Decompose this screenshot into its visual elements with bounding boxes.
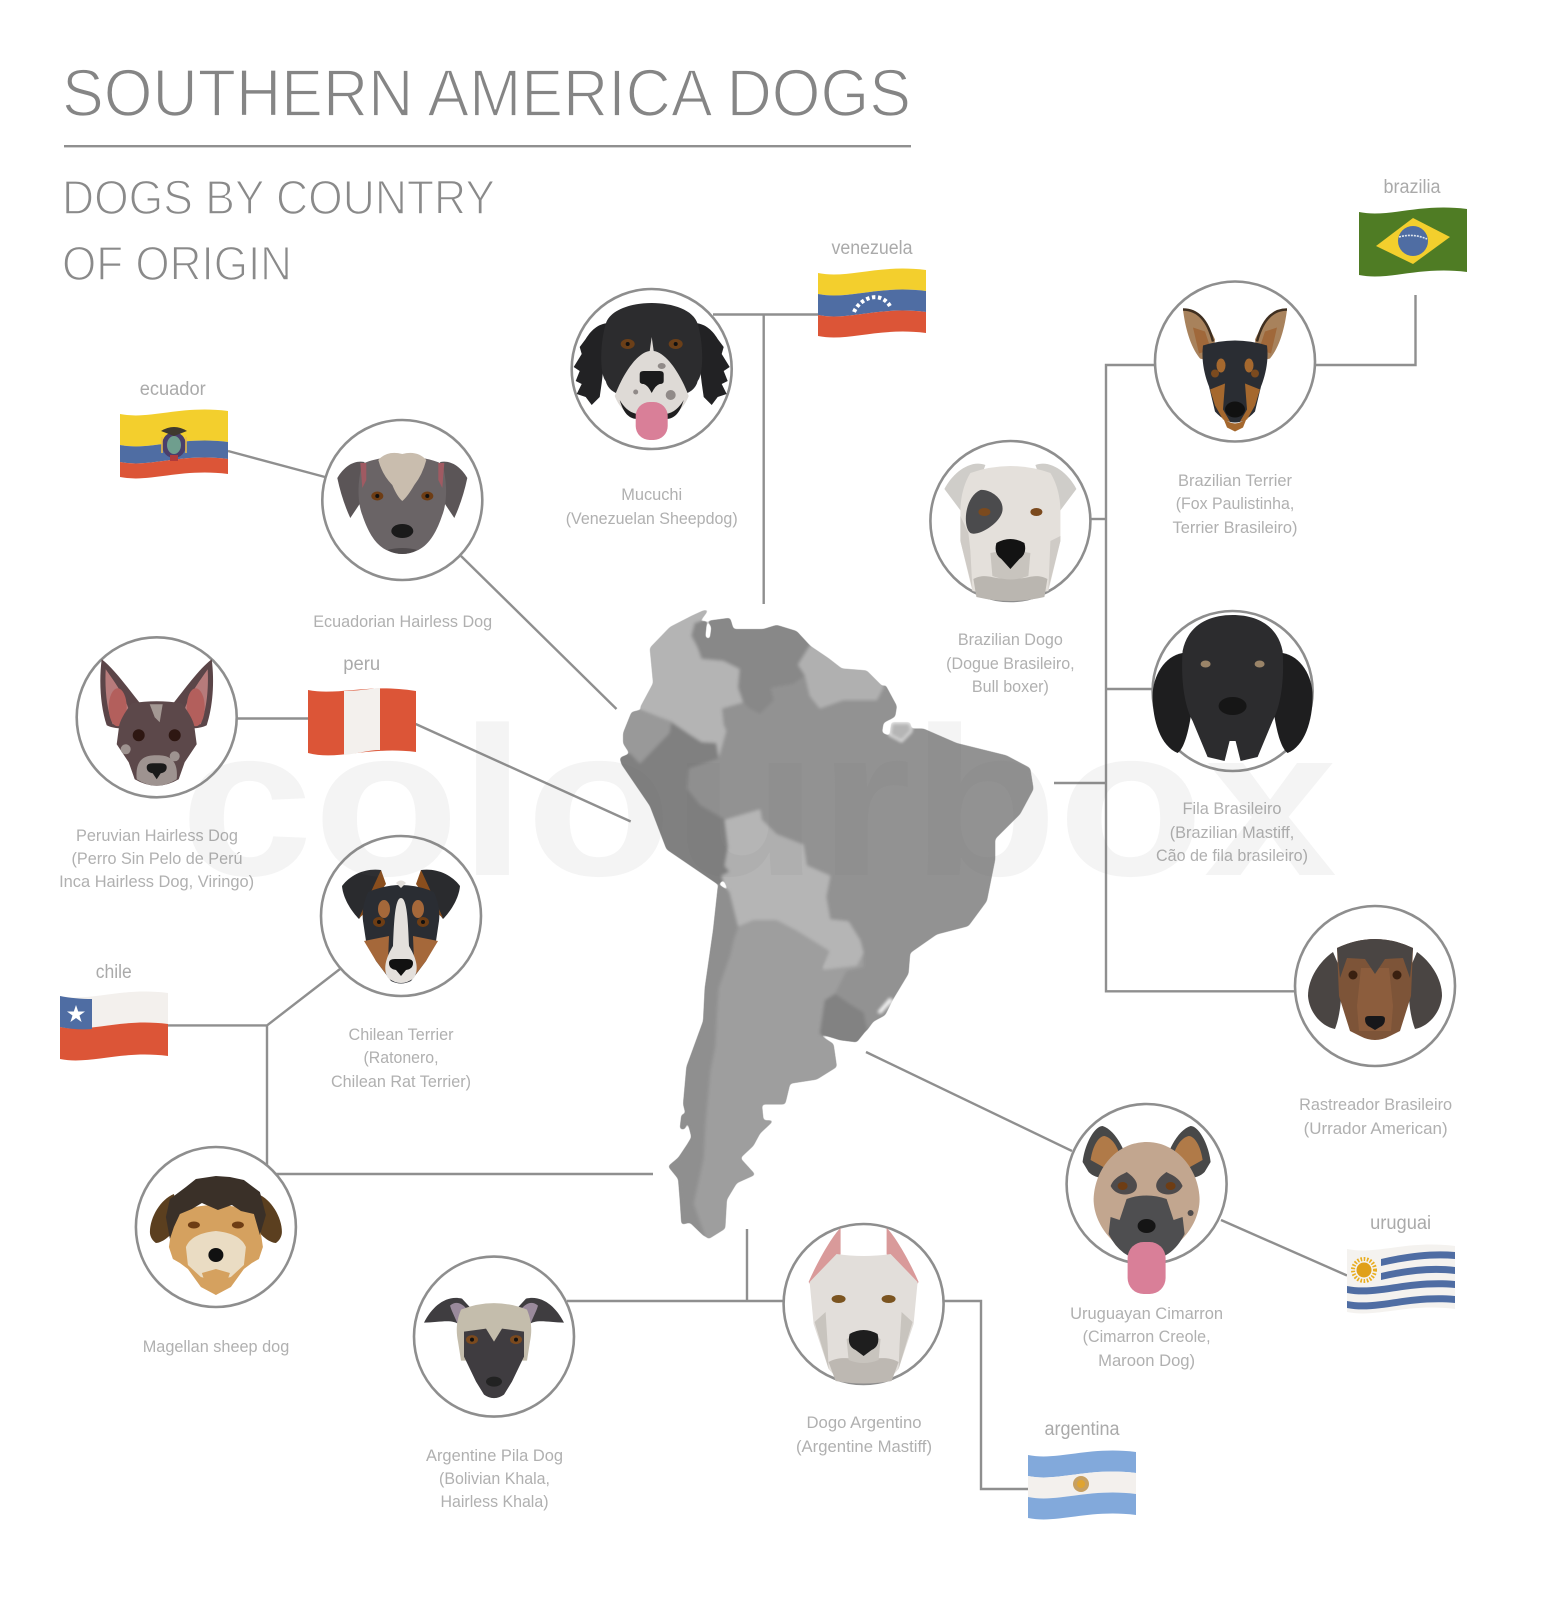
panel: Rastreador Brasileiro: [1295, 906, 1455, 1138]
map: Guianas: [798, 646, 883, 708]
flag: Chile: [60, 992, 168, 1060]
label: Uruguayan Cimarron: Maroon Dog): [1098, 1351, 1195, 1370]
flag: Argentina: [1028, 1451, 1136, 1519]
label: Chilean Terrier: (Ratonero,: [364, 1048, 438, 1067]
label: Ecuadorian Hairless Dog: Ecuadorian Hairless Dog: [313, 612, 492, 631]
label: Brazilian Dogo: (Dogue Brasileiro,: [946, 654, 1075, 673]
portrait: Dogo Argentino: [784, 1224, 944, 1384]
label: Peruvian Hairless Dog: (Perro Sin Pelo de Perú: [72, 849, 242, 868]
portrait: Magellan sheep dog: [136, 1147, 296, 1307]
label: Mucuchi: Mucuchi: [621, 485, 682, 504]
label: Peruvian Hairless Dog: [59, 826, 254, 891]
flag label: uruguai: uruguai: [1370, 1213, 1431, 1234]
panel: Peruvian Hairless Dog: [59, 637, 254, 891]
label: Chilean Terrier: Chilean Terrier: [348, 1025, 454, 1044]
map: Venezuela: [692, 618, 810, 713]
portrait: Peruvian Hairless Dog: [77, 637, 237, 797]
portrait: Brazilian Terrier: [1155, 282, 1315, 442]
label: Mucuchi: [566, 485, 738, 528]
map: South America: [620, 610, 1033, 1239]
label: Brazilian Dogo: Bull boxer): [972, 677, 1049, 696]
title rule: [64, 145, 911, 147]
subtitle: DOGS BY COUNTRY: [62, 172, 495, 225]
panel: Dogo Argentino: [784, 1224, 944, 1456]
label: Rastreador Brasileiro: Rastreador Brasileiro: [1299, 1095, 1452, 1114]
label: Rastreador Brasileiro: [1299, 1095, 1452, 1138]
map: Chile: [668, 884, 738, 1237]
map: Colombia: [640, 610, 743, 758]
flag: Peru: [308, 688, 416, 755]
label: Brazilian Terrier: Brazilian Terrier: [1178, 471, 1292, 490]
flag: Ecuador: [120, 410, 228, 478]
label: Argentine Pila Dog: Hairless Khala): [440, 1492, 548, 1511]
label: Argentine Pila Dog: [426, 1446, 563, 1511]
portrait: Brazilian Dogo: [930, 441, 1090, 601]
map: Uruguay: [820, 994, 867, 1042]
panel: Mucuchi: [566, 289, 738, 528]
portrait: Mucuchi: [572, 289, 732, 449]
portrait: Argentine Pila Dog: [414, 1257, 574, 1417]
label: Argentine Pila Dog: Argentine Pila Dog: [426, 1446, 563, 1465]
map: Peru: [620, 723, 730, 884]
label: Mucuchi: (Venezuelan Sheepdog): [566, 509, 738, 528]
watermark: colourbox: [180, 683, 1337, 920]
panel: Ecuadorian Hairless Dog: [313, 420, 492, 631]
flag label: peru: peru: [343, 654, 380, 675]
map: Argentina: [693, 920, 864, 1239]
portrait: Fila Brasileiro: [1153, 611, 1313, 771]
label: Uruguayan Cimarron: [1070, 1304, 1223, 1370]
label: Rastreador Brasileiro: (Urrador American): [1304, 1119, 1448, 1138]
flag label: ecuador: ecuador: [140, 379, 206, 400]
label: Brazilian Terrier: [1172, 471, 1298, 537]
coat of arms: [161, 427, 187, 461]
label: Magellan sheep dog: Magellan sheep dog: [143, 1337, 289, 1356]
portrait: Uruguayan Cimarron: [1067, 1104, 1227, 1294]
subtitle: OF ORIGIN: [62, 238, 292, 291]
label: Fila Brasileiro: (Brazilian Mastiff,: [1170, 823, 1294, 842]
flag: Venezuela: [818, 269, 926, 337]
label: Fila Brasileiro: Cão de fila brasileiro): [1156, 846, 1308, 865]
map: Ecuador: [623, 710, 672, 764]
connectors: [168, 295, 1416, 1489]
flag label: brazilia: brazilia: [1384, 177, 1441, 198]
flag label: argentina: argentina: [1044, 1419, 1120, 1440]
panel: Brazilian Terrier: [1155, 282, 1315, 537]
map: Marajo island: [890, 723, 912, 741]
map: lagoon: [878, 998, 892, 1013]
label: Dogo Argentino: [796, 1413, 932, 1456]
label: Dogo Argentino: Dogo Argentino: [806, 1413, 922, 1432]
portrait: Rastreador Brasileiro: [1295, 906, 1455, 1066]
portrait: Ecuadorian Hairless Dog: [322, 420, 482, 580]
label: Argentine Pila Dog: (Bolivian Khala,: [439, 1469, 550, 1488]
panel: Brazilian Dogo: [930, 441, 1090, 696]
label: Brazilian Terrier: Terrier Brasileiro): [1172, 518, 1298, 537]
flag label: chile: chile: [96, 962, 132, 983]
label: Peruvian Hairless Dog: Peruvian Hairless Dog: [76, 826, 238, 845]
label: Peruvian Hairless Dog: Inca Hairless Dog, Viringo): [59, 872, 254, 891]
map: Chiloe island: [680, 1114, 688, 1129]
flag: Brazil: [1359, 208, 1467, 276]
flag: Uruguay: [1347, 1245, 1455, 1313]
label: Chilean Terrier: Chilean Rat Terrier): [331, 1072, 471, 1091]
label: Brazilian Dogo: Brazilian Dogo: [958, 630, 1063, 649]
label: Brazilian Dogo: [946, 630, 1075, 696]
title: SOUTHERN AMERICA DOGS: [62, 56, 911, 131]
map: Bolivia and Paraguay: [722, 810, 863, 969]
panel: Magellan sheep dog: [136, 1147, 296, 1356]
label: Fila Brasileiro: Fila Brasileiro: [1182, 799, 1282, 818]
panel: Fila Brasileiro: [1153, 611, 1313, 865]
label: Uruguayan Cimarron: Uruguayan Cimarron: [1070, 1304, 1223, 1323]
label: Fila Brasileiro: [1156, 799, 1308, 865]
panel: Uruguayan Cimarron: [1067, 1104, 1227, 1370]
label: Uruguayan Cimarron: (Cimarron Creole,: [1083, 1327, 1211, 1346]
flag label: venezuela: venezuela: [832, 238, 913, 259]
label: Dogo Argentino: (Argentine Mastiff): [796, 1437, 932, 1456]
panel: Chilean Terrier: [321, 836, 481, 1091]
label: Brazilian Terrier: (Fox Paulistinha,: [1176, 494, 1294, 513]
label: Chilean Terrier: [331, 1025, 471, 1091]
subtitle: [62, 172, 495, 291]
portrait: Chilean Terrier: [321, 836, 481, 996]
map: Brazil: [687, 675, 1033, 1030]
panel: Argentine Pila Dog: [414, 1257, 574, 1511]
